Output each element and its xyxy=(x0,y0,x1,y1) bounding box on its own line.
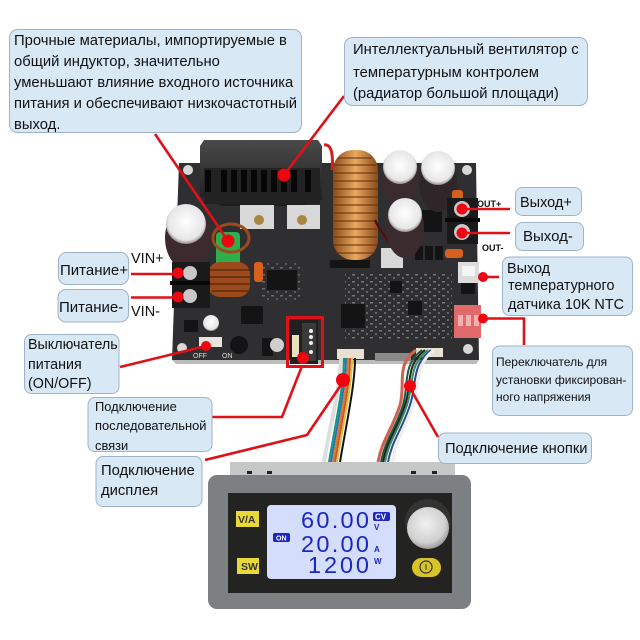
leader lines xyxy=(120,96,524,460)
board connectors xyxy=(337,348,443,361)
green inductor xyxy=(208,190,463,297)
V/A button: V/A xyxy=(238,514,256,526)
temperature sensor connector xyxy=(458,262,479,283)
LCD screen: A xyxy=(374,545,380,554)
electrolytic capacitors xyxy=(165,150,457,352)
callout: power minus xyxy=(58,290,128,322)
callout: power switch: питания xyxy=(28,357,82,373)
callout: power switch: Выключатель xyxy=(28,337,118,353)
callout: fixed voltage switch: ного напряжения xyxy=(496,390,591,404)
power switch: OFF xyxy=(193,353,207,360)
callout: serial connection xyxy=(88,398,212,453)
SW button xyxy=(237,558,259,574)
callout: button connection: Подключение кнопки xyxy=(445,441,588,457)
callout: button connection xyxy=(438,433,592,464)
LCD screen xyxy=(267,505,396,579)
callout: inductor materials: уменьшают влияние входного источника xyxy=(14,75,294,91)
large toroid coil xyxy=(333,150,403,268)
small components xyxy=(184,210,475,356)
callout: inductor materials xyxy=(10,30,302,133)
callout: inductor materials: выход. xyxy=(14,117,60,133)
callout: inductor materials: общий индуктор, значительно xyxy=(14,54,220,70)
callout: power minus: Питание- xyxy=(59,299,123,316)
callout: smart fan: Интеллектуальный вентилятор с xyxy=(353,42,579,58)
knob xyxy=(405,499,451,549)
callout: output plus: Выход+ xyxy=(520,195,572,211)
power button xyxy=(412,558,441,577)
LCD screen: V xyxy=(374,523,380,532)
callout: output minus xyxy=(516,222,584,250)
callout: output minus: Выход- xyxy=(523,228,573,245)
callout: temperature sensor output: Выход xyxy=(507,261,551,277)
power switch: ON xyxy=(222,353,232,360)
callout: temperature sensor output: датчика 10K NTC xyxy=(508,297,624,313)
callout: power switch: (ON/OFF) xyxy=(28,376,92,392)
callout: fixed voltage switch: установки фиксирован- xyxy=(496,373,626,387)
right ribbon cable xyxy=(378,350,434,462)
DIP switch xyxy=(454,305,481,338)
callout: temperature sensor output: температурного xyxy=(508,278,614,294)
left ribbon cable xyxy=(324,358,355,462)
board labels: VIN- xyxy=(131,304,160,320)
board labels: OUT+ xyxy=(477,199,501,209)
board labels: OUT- xyxy=(482,243,504,253)
callout: output plus xyxy=(516,188,582,216)
board labels xyxy=(131,199,504,320)
callout: smart fan xyxy=(344,38,588,106)
V/A button xyxy=(236,511,259,527)
input terminal block xyxy=(170,262,210,308)
callout: smart fan: температурным контролем xyxy=(353,65,539,81)
LCD screen: ON xyxy=(276,536,286,542)
callout: fixed voltage switch: Переключатель для xyxy=(496,355,607,369)
circuit board xyxy=(172,163,479,364)
LCD screen: 60.00 xyxy=(301,507,369,533)
callout: temperature sensor output xyxy=(502,257,632,316)
LCD screen: 1200 xyxy=(308,552,369,578)
callout: display connection xyxy=(96,456,202,506)
callout: power plus xyxy=(58,252,128,284)
callout: smart fan: (радиатор большой площади) xyxy=(353,86,559,102)
LCD screen: W xyxy=(374,557,382,566)
SW button: SW xyxy=(241,561,258,573)
power switch xyxy=(193,337,232,360)
board labels: VIN+ xyxy=(131,251,164,267)
callout: power switch xyxy=(24,334,122,394)
callout: fixed voltage switch xyxy=(492,346,632,416)
output terminal block xyxy=(445,198,480,244)
display module xyxy=(208,462,471,609)
callout: serial connection: последовательной xyxy=(95,418,207,433)
callout: serial connection: Подключение xyxy=(95,399,177,414)
callout: display connection: Подключение xyxy=(101,463,195,479)
LCD screen: 20.00 xyxy=(301,531,369,557)
callout: power plus: Питание+ xyxy=(60,262,128,279)
callout: inductor materials: питания и обеспечивают низкочастотный xyxy=(14,96,297,112)
callout: inductor materials: Прочные материалы, импортируемые в xyxy=(14,33,287,49)
callout: serial connection: связи xyxy=(95,438,128,453)
fan and heatsink xyxy=(200,140,332,229)
serial connector in red frame xyxy=(288,318,322,366)
callout: display connection: дисплея xyxy=(101,483,158,499)
LCD screen: CV xyxy=(375,512,387,522)
